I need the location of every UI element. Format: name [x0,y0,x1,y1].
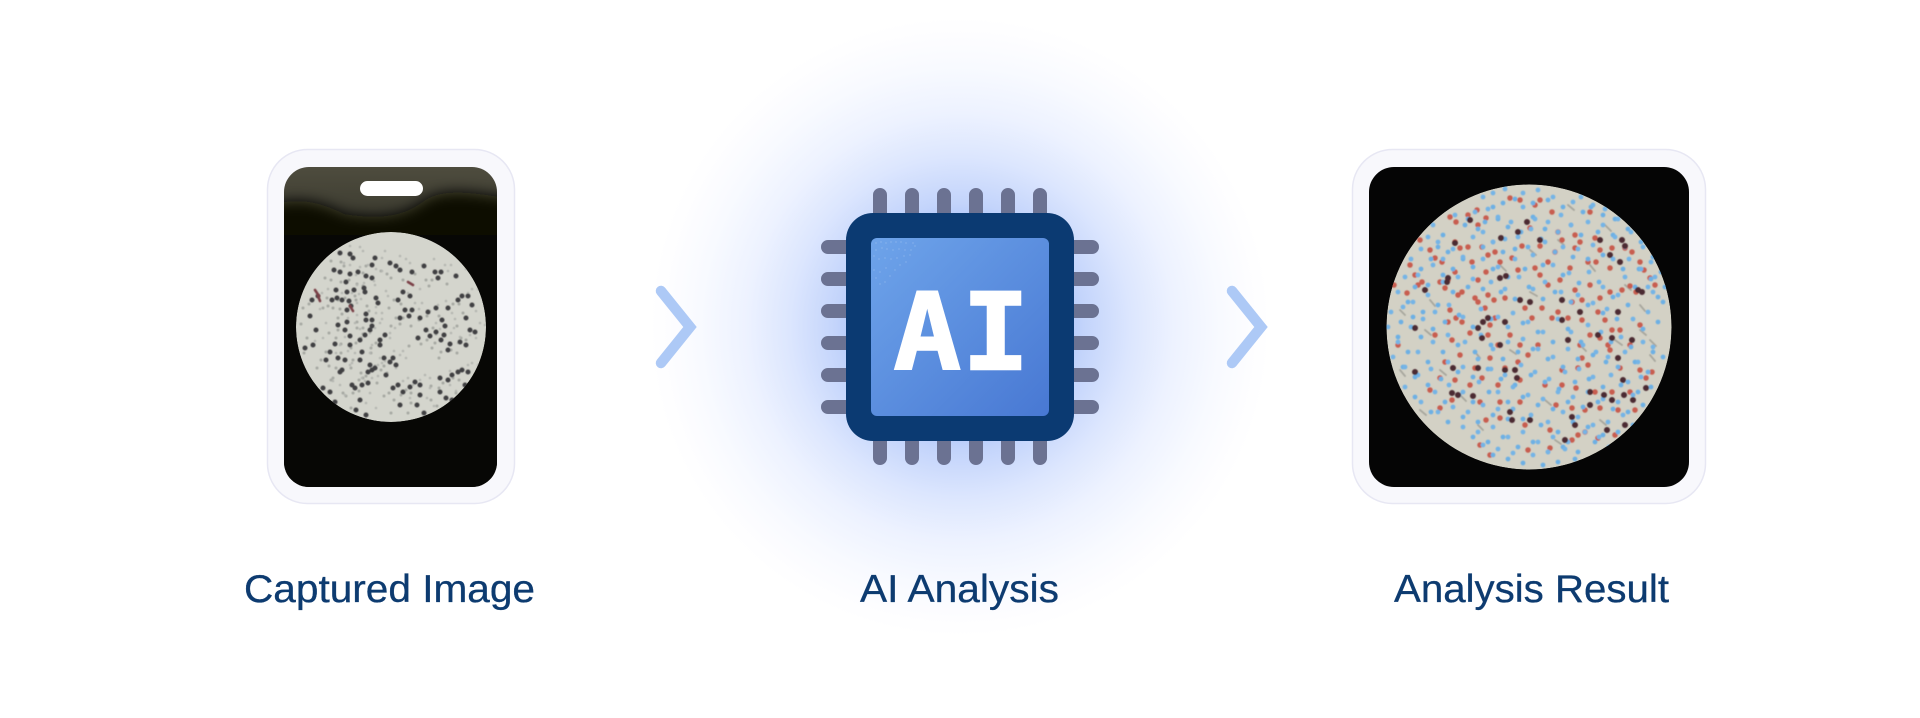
chip face [871,238,1049,416]
annotated microscope field [1386,184,1672,470]
infographic canvas [246,71,1706,610]
label: Analysis Result: Analysis Result [1394,568,1669,611]
panel: analysis result [1352,150,1706,504]
microscope field grayscale [296,232,486,423]
phone frame [268,150,514,504]
result screen [1369,167,1689,487]
phone screen [284,167,497,487]
label: Captured Image: Captured Image [244,568,535,611]
AI lettering: AI [893,272,1030,396]
arrow: AI analysis to result [1232,291,1261,363]
label: AI Analysis: AI Analysis [860,568,1059,611]
phone notch [360,181,423,196]
panel: captured image [265,150,520,504]
chip pins [828,195,1092,458]
icon: AI chip [828,195,1092,458]
chip body [846,213,1074,441]
result frame [1352,150,1706,504]
chip face speckle [874,242,915,284]
background glow behind chip [650,17,1270,637]
arrow: captured image to AI analysis [661,291,690,363]
